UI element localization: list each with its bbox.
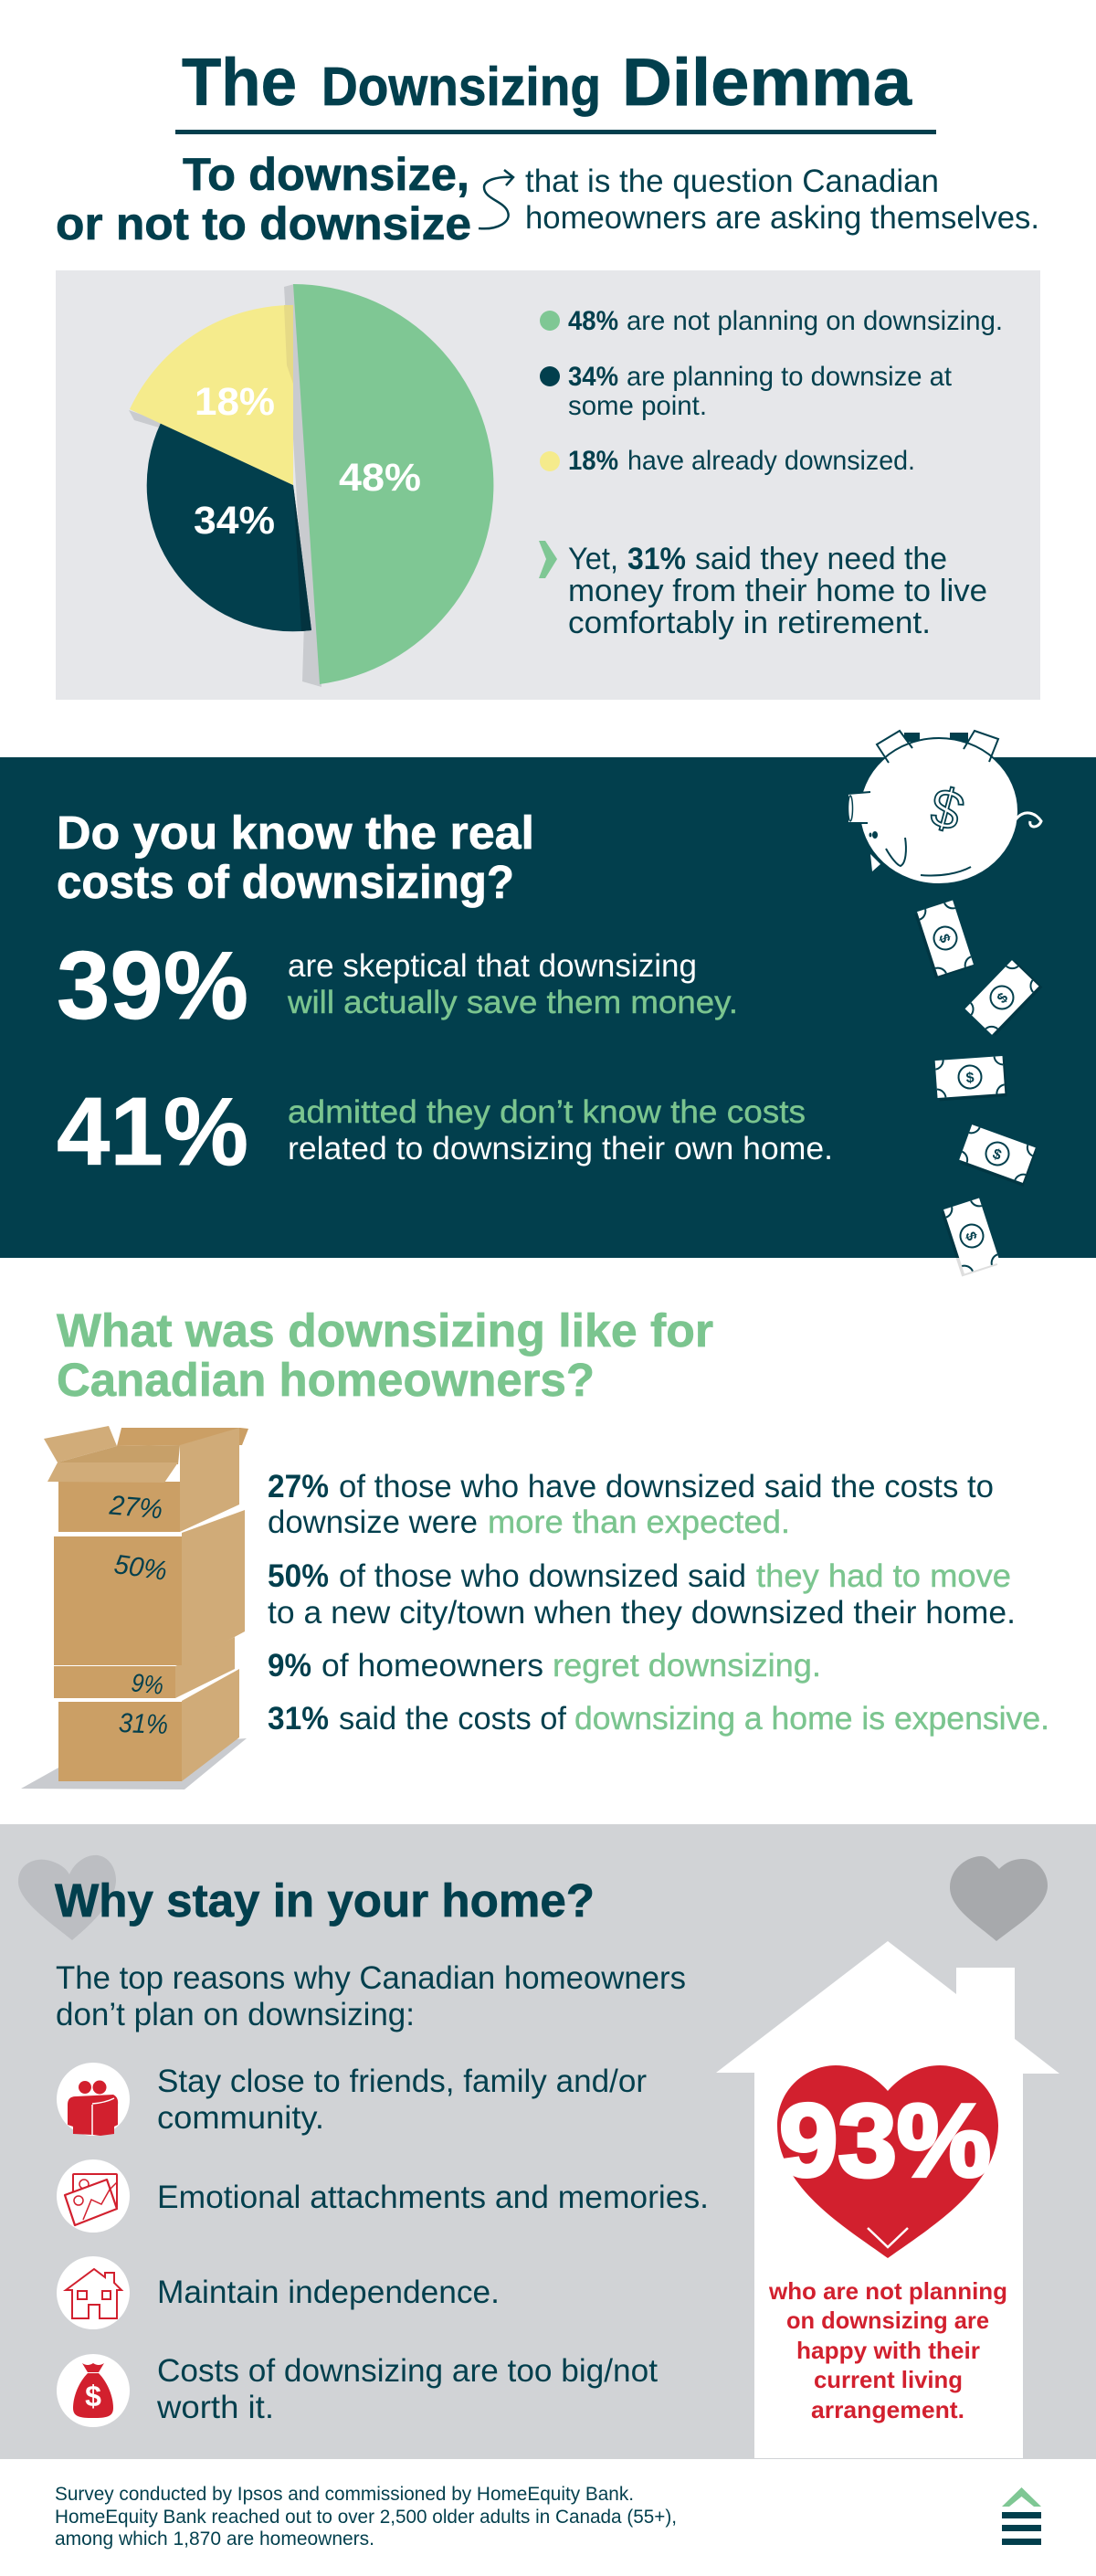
callout: need the money: said they need the: [695, 542, 947, 576]
text block: downsizing experience stats: downsize were: [268, 1504, 478, 1540]
panel: real costs of downsizing: [0, 731, 1096, 1277]
callout: need the money: 31%: [627, 542, 686, 576]
text block: downsizing experience stats: regret downsizing.: [553, 1648, 821, 1684]
icon: piggy bank: [848, 731, 1041, 884]
legend: some point.: [568, 391, 707, 421]
reason: friends and family: Stay close to friends, family and/or: [157, 2064, 647, 2099]
footer: survey source: among which 1,870 are homeowners.: [55, 2528, 374, 2550]
box: 50%: [54, 1510, 245, 1665]
icon: faded heart left: [18, 1855, 116, 1940]
reason: costs too big: [57, 2353, 658, 2427]
illustration: white house: [716, 1941, 1059, 2458]
legend: have already downsized.: [627, 446, 915, 476]
stat: 41%: admitted they don’t know the costs: [288, 1094, 806, 1130]
icon: falling dollar bill 3: $: [965, 1071, 975, 1086]
footer: survey source: [55, 2484, 677, 2550]
text block: happy with living arrangement: happy with their: [796, 2337, 980, 2364]
icon: money bag: $: [85, 2380, 101, 2412]
reason: maintain independence: [57, 2256, 500, 2329]
text block: downsizing experience stats: [268, 1469, 1049, 1737]
heading: what was downsizing like: [57, 1304, 713, 1406]
icon: house outline: [57, 2256, 130, 2329]
subtitle: question text: homeowners are asking themselves.: [525, 200, 1039, 236]
title: Downsizing: [321, 57, 601, 117]
callout: need the money: money from their home to live: [568, 574, 987, 608]
text block: downsizing experience stats: they had to move: [756, 1558, 1011, 1594]
title: Dilemma: [622, 46, 912, 120]
title: The: [182, 46, 297, 120]
text block: downsizing experience stats: of homeowners: [321, 1648, 543, 1684]
icon: falling dollar bill 4: [958, 1124, 1038, 1187]
panel: why stay in your home: [0, 1824, 1096, 2459]
heading: real costs: costs of downsizing?: [57, 856, 514, 908]
subtitle: question text: [525, 164, 1039, 236]
text block: downsizing experience stats: said the costs of: [339, 1701, 566, 1737]
icon: falling dollar bill 2: [965, 959, 1042, 1037]
icon: photographs: [57, 2159, 130, 2233]
box: 31%: 31%: [118, 1708, 169, 1740]
heading: what was downsizing like: Canadian homeowners?: [57, 1354, 595, 1406]
callout: need the money: comfortably in retirement.: [568, 606, 931, 640]
legend: are planning to downsize at: [627, 362, 953, 392]
stat: 39%: [57, 932, 738, 1040]
legend: are not planning on downsizing.: [627, 306, 1003, 336]
text block: happy with living arrangement: arrangement.: [811, 2396, 964, 2423]
text block: top reasons intro: don’t plan on downsizing:: [56, 1997, 415, 2032]
icon: HomeEquity Bank logo: [1002, 2487, 1041, 2545]
icon: money bag: [57, 2354, 130, 2427]
text block: happy with living arrangement: [768, 2277, 1007, 2423]
title: [182, 46, 912, 120]
legend: [540, 306, 1003, 476]
pie chart: [129, 284, 493, 687]
text block: downsizing experience stats: 31%: [268, 1701, 329, 1737]
box: 31%: [58, 1669, 239, 1781]
icon: two people: [57, 2063, 130, 2136]
callout: need the money: Yet,: [568, 542, 618, 576]
footer: survey source: Survey conducted by Ipsos and commissioned by HomeEquity Bank.: [55, 2484, 634, 2505]
text block: happy with living arrangement: on downsizing are: [786, 2307, 989, 2334]
text block: happy with living arrangement: current living: [814, 2366, 963, 2393]
icon: red heart with 93%: [777, 2065, 998, 2258]
text block: downsizing experience stats: of those who have downsized said the costs to: [339, 1469, 994, 1504]
heading: real costs: [57, 807, 534, 908]
icon: grey heart smoke: [950, 1856, 1048, 1941]
text block: downsizing experience stats: to a new city/town when they downsized their home.: [268, 1595, 1016, 1631]
text block: downsizing experience stats: 27%: [268, 1469, 329, 1504]
text block: top reasons intro: The top reasons why Canadian homeowners: [56, 1960, 686, 1996]
box: 9%: 9%: [130, 1668, 164, 1700]
icon: falling dollar bill 4: $: [990, 1146, 1004, 1164]
heading: what was downsizing like: What was downsizing like for: [57, 1304, 713, 1357]
reason: attachments and memories: Emotional attachments and memories.: [157, 2180, 709, 2215]
icon: falling dollar bill 1: [914, 900, 975, 979]
icon: curly arrow: [479, 170, 513, 228]
legend: 34%: [568, 362, 618, 392]
heading: why stay: Why stay in your home?: [55, 1874, 595, 1927]
text block: downsizing experience stats: 50%: [268, 1558, 329, 1594]
stat: 41%: related to downsizing their own home.: [288, 1131, 833, 1167]
panel: survey pie chart: [56, 270, 1040, 700]
reason: friends and family: [57, 2063, 647, 2136]
callout: need the money: [539, 541, 987, 640]
legend: 18%: [568, 446, 618, 476]
subtitle: to downsize or not: or not to downsize: [56, 198, 471, 249]
illustration: stacked moving boxes: [21, 1426, 248, 1789]
box: 50%: 50%: [112, 1549, 169, 1587]
reason: friends and family: community.: [157, 2100, 324, 2136]
text block: top reasons intro: [56, 1960, 686, 2032]
icon: falling dollar bill 5: $: [962, 1230, 979, 1242]
stat: 41%: [57, 1078, 833, 1186]
stat: 41%: 41%: [57, 1078, 248, 1186]
pie chart: 34%: [194, 499, 275, 543]
footer: survey source: HomeEquity Bank reached out to over 2,500 older adults in Canada (55+),: [55, 2507, 677, 2528]
reason: costs too big: worth it.: [156, 2390, 274, 2425]
reason: maintain independence: Maintain independence.: [157, 2275, 500, 2310]
reason: attachments and memories: [57, 2159, 709, 2233]
subtitle: to downsize or not: To downsize,: [183, 149, 469, 200]
stat: 39%: are skeptical that downsizing: [288, 948, 697, 984]
box: 27% open: [44, 1426, 248, 1532]
text block: downsizing experience stats: downsizing a home is expensive.: [574, 1701, 1049, 1737]
box: 9%: [54, 1637, 235, 1700]
heading: real costs: Do you know the real: [57, 807, 534, 859]
text block: happy with living arrangement: who are not planning: [768, 2277, 1007, 2305]
reason: costs too big: Costs of downsizing are too big/not: [157, 2353, 658, 2389]
icon: falling dollar bill 2: $: [995, 990, 1011, 1007]
legend: 48%: [568, 306, 618, 336]
subtitle: to downsize or not: [56, 149, 471, 249]
subtitle: question text: that is the question Canadian: [525, 164, 939, 199]
text block: downsizing experience stats: of those who downsized said: [339, 1558, 746, 1594]
pie chart: 18%: [195, 380, 275, 424]
icon: red heart with 93%: 93%: [779, 2083, 991, 2198]
stat: 39%: will actually save them money.: [287, 985, 738, 1020]
icon: falling dollar bill 3: [935, 1056, 1007, 1102]
icon: falling dollar bill 1: $: [935, 933, 953, 945]
icon: piggy bank: $: [924, 776, 969, 842]
text block: downsizing experience stats: 9%: [268, 1648, 311, 1684]
icon: falling dollar bill 5: [941, 1198, 1001, 1277]
stat: 39%: 39%: [57, 932, 248, 1040]
box: 27% open: 27%: [108, 1490, 163, 1525]
pie chart: 48%: [339, 456, 421, 500]
text block: downsizing experience stats: more than expected.: [488, 1504, 790, 1540]
